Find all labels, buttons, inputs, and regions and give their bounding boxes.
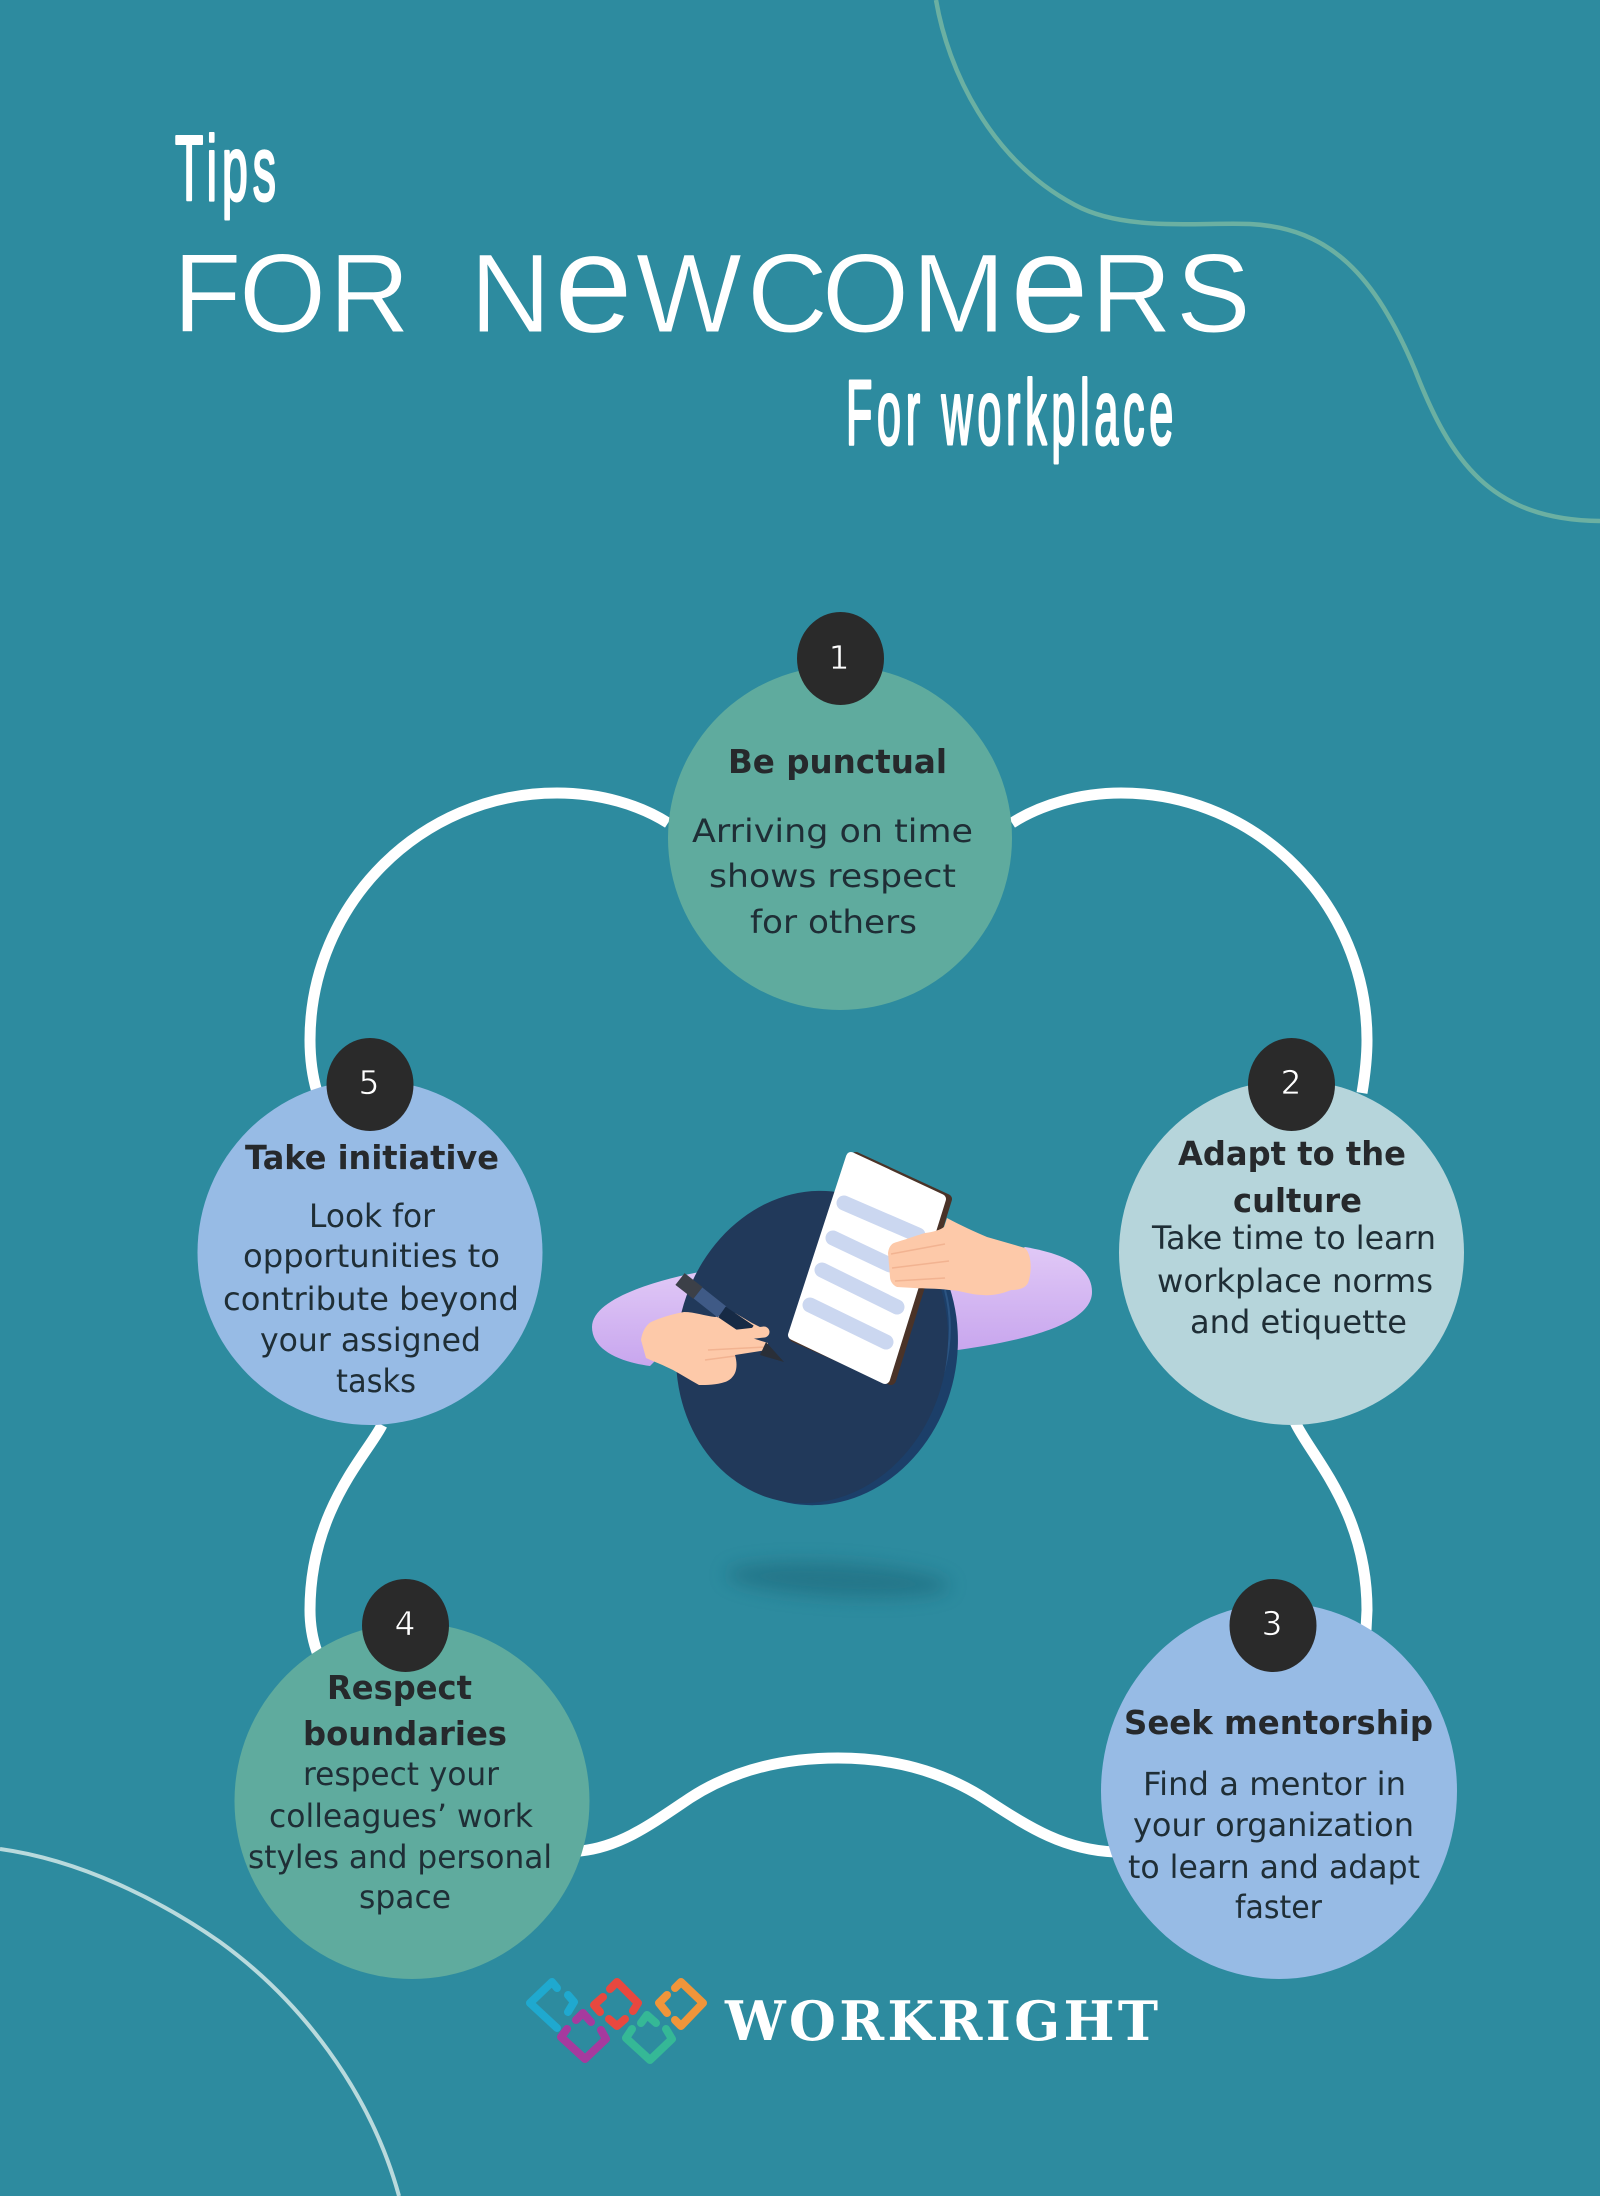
text: tip 1 description: for others: [750, 903, 917, 941]
text: tip 1 description: shows respect: [709, 857, 956, 895]
shadow under disc: [725, 1557, 951, 1603]
left hand: [641, 1312, 768, 1385]
text: tip 3 description: faster: [1235, 1888, 1323, 1926]
title: Tips: Tips: [175, 118, 281, 220]
text: tip 2 description: Take time to learn: [1151, 1219, 1436, 1257]
text: tip 5 description: tasks: [336, 1362, 416, 1400]
title: FOR NeWCOMeRS: e: [554, 204, 633, 363]
text: tip 2 description: [1151, 1219, 1436, 1341]
panel: tip 2 Adapt to the culture: [1119, 1038, 1464, 1425]
illustration: hands with tablet and pen over navy disc: [592, 1157, 1092, 1603]
title: FOR NeWCOMeRS: N: [470, 231, 551, 356]
connector line linking the five tips: [310, 793, 1367, 1852]
text: tip 3 description: Find a mentor in: [1143, 1765, 1406, 1803]
right hand: [888, 1218, 1031, 1295]
title: FOR NeWCOMeRS: FOR: [173, 231, 410, 356]
logo: Workright mark: [530, 1982, 703, 2060]
decorative curve: bottom left: [0, 1849, 399, 2196]
heading: Seek mentorship: Seek mentorship: [1124, 1703, 1433, 1742]
panel: tip 1 Be punctual: [668, 612, 1012, 1010]
panel: tip 4 Respect boundaries: [234, 1579, 590, 1979]
text: tip 5 description: [223, 1197, 519, 1400]
text: tip 3 description: to learn and adapt: [1128, 1848, 1420, 1886]
sleeve: right arm: [950, 1247, 1092, 1351]
logo: WORKRIGHT wordmark: WORKRIGHT: [724, 1989, 1158, 2053]
pen: [680, 1279, 784, 1362]
text: tip 5 description: Look for: [309, 1197, 436, 1235]
heading: Be punctual: Be punctual: [728, 742, 947, 781]
heading: Respect boundaries: [303, 1668, 507, 1753]
heading: Adapt to the culture: Adapt to the: [1178, 1134, 1406, 1173]
badge: number 5: [326, 1038, 414, 1131]
text: tip 4 description: space: [359, 1878, 451, 1916]
heading: Adapt to the culture: [1178, 1134, 1406, 1220]
title: FOR NeWCOMeRS: WCOM: [636, 231, 1005, 356]
badge: number 1: 1: [828, 638, 850, 677]
sleeve: left arm: [592, 1271, 705, 1366]
heading: Adapt to the culture: culture: [1233, 1181, 1362, 1220]
text: tip 3 description: [1128, 1765, 1420, 1926]
badge: number 4: [362, 1579, 449, 1672]
badge: number 5: 5: [358, 1063, 380, 1102]
text: tip 4 description: [248, 1755, 552, 1916]
badge: number 2: [1248, 1038, 1335, 1131]
decorative curve: top right: [936, 0, 1600, 521]
text: tip 1 description: Arriving on time: [692, 812, 973, 850]
heading: Take initiative: Take initiative: [245, 1138, 499, 1177]
heading: Respect boundaries: boundaries: [303, 1714, 507, 1753]
badge: number 3: 3: [1262, 1604, 1282, 1643]
text: tip 5 description: opportunities to: [243, 1237, 500, 1275]
text: tip 3 description: your organization: [1133, 1806, 1414, 1844]
panel: tip 3 Seek mentorship: [1101, 1579, 1457, 1979]
text: tip 5 description: your assigned: [260, 1321, 481, 1359]
text: For workplace: [846, 362, 1178, 464]
tablet: [793, 1157, 947, 1380]
text: tip 2 description: and etiquette: [1190, 1303, 1407, 1341]
navy disc: [647, 1165, 987, 1531]
badge: number 1: [797, 612, 884, 705]
badge: number 2: 2: [1280, 1063, 1302, 1102]
title: FOR NeWCOMeRS: RS: [1091, 231, 1251, 356]
text: tip 1 description: [692, 812, 973, 941]
text: tip 2 description: workplace norms: [1157, 1262, 1433, 1300]
heading: Respect boundaries: Respect: [327, 1668, 472, 1707]
text: tip 4 description: colleagues’ work: [269, 1797, 533, 1835]
text: tip 5 description: contribute beyond: [223, 1280, 519, 1318]
panel: tip 5 Take initiative: [198, 1038, 542, 1425]
text: tip 4 description: respect your: [303, 1755, 500, 1793]
title: FOR NeWCOMeRS: e: [1010, 204, 1089, 363]
badge: number 4: 4: [394, 1604, 416, 1643]
text: tip 4 description: styles and personal: [248, 1838, 552, 1876]
badge: number 3: [1230, 1579, 1316, 1672]
